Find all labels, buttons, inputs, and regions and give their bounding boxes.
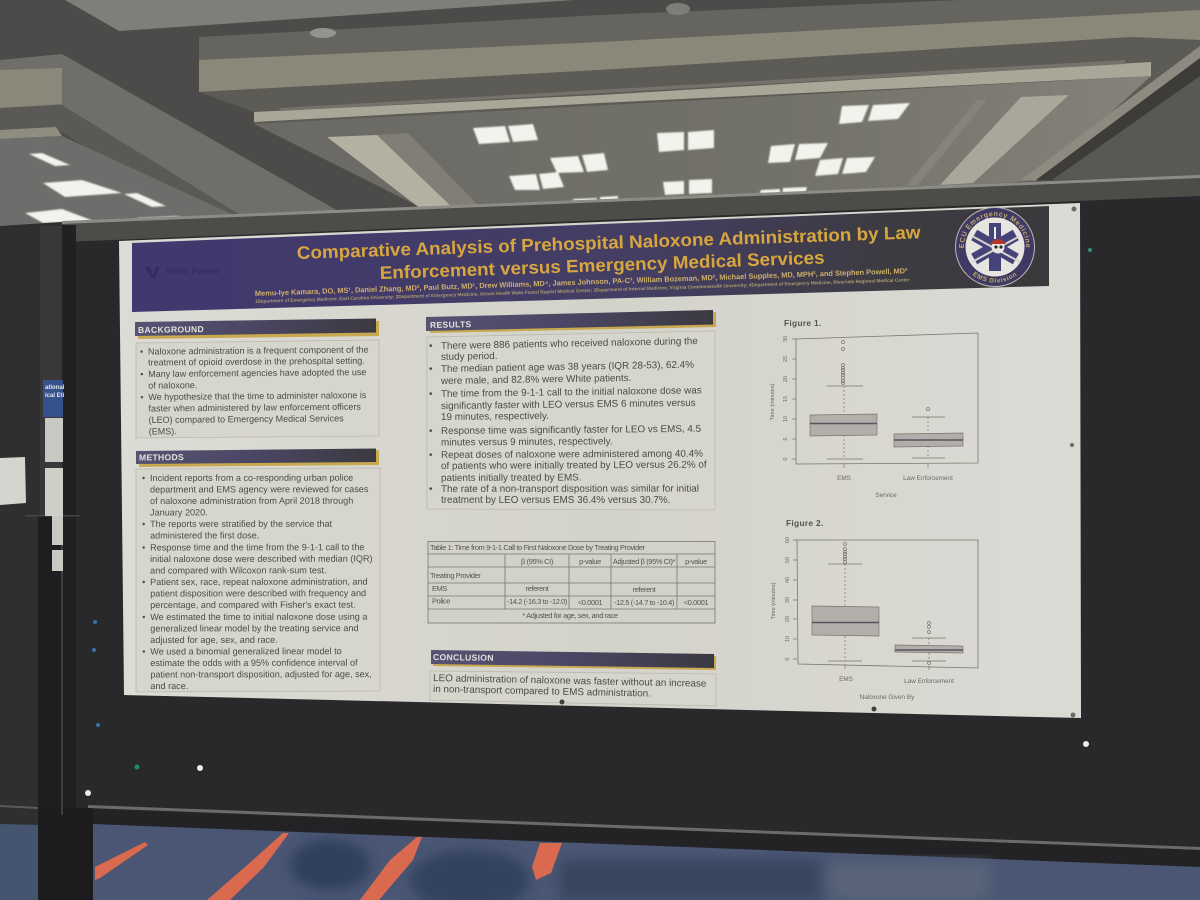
methods text: We used a binomial generalized linear model to <box>150 646 342 656</box>
methods text: • <box>142 519 145 529</box>
table 1: β (95% CI) <box>521 557 553 566</box>
methods text: administered the first dose. <box>150 530 259 540</box>
table 1: EMS <box>432 584 447 593</box>
results text: • <box>429 389 433 400</box>
results text: • <box>429 341 433 352</box>
results text: • <box>429 484 433 495</box>
methods text: The reports were stratified by the service that <box>150 519 333 529</box>
results text: The time from the 9-1-1 call to the initial naloxone dose was <box>441 385 702 400</box>
methods text: patient non-transport disposition, adjusted for age, sex, <box>150 669 372 679</box>
table 1: * Adjusted for age, sex, and race <box>522 611 618 620</box>
box plot: time by service: 30 <box>783 336 789 342</box>
methods text: and race. <box>150 681 188 691</box>
results text: Response time was significantly faster for LEO vs EMS, 4.5 <box>441 424 702 437</box>
box plot: time by naloxone provider: 30 <box>785 597 791 603</box>
background text: (LEO) compared to Emergency Medical Services <box>149 413 344 425</box>
box plot: time by service: 5 <box>783 437 789 441</box>
results text: • <box>429 450 433 461</box>
table 1: <0.0001 <box>684 598 708 607</box>
box plot: time by naloxone provider: 50 <box>785 557 791 563</box>
results text: of patients who were initially treated by LEO versus 26.2% of <box>441 460 707 472</box>
methods text: Response time and the time from the 9-1-1 call to the <box>150 542 364 552</box>
box plot: time by service: EMS <box>837 475 851 482</box>
ceiling lights <box>25 103 910 223</box>
figure 2 title: Figure 2. <box>786 518 824 528</box>
results text: 19 minutes, respectively. <box>441 411 549 423</box>
heading: background <box>135 318 379 339</box>
panel: results <box>426 310 716 510</box>
background text: • <box>140 392 144 402</box>
neighbouring poster at left <box>0 380 65 571</box>
box plot: time by service: Law Enforcement <box>903 475 953 482</box>
background text: treatment of opioid overdose in the prehospital setting. <box>148 356 365 367</box>
box plot: time by service <box>770 333 978 499</box>
heading: conclusion <box>431 650 716 670</box>
background text: • <box>140 347 143 357</box>
background text: We hypothesize that the time to administer naloxone is <box>148 390 367 402</box>
table 1: <0.0001 <box>578 598 602 607</box>
results text: treatment by LEO versus EMS 36.4% versus 30.7%. <box>441 495 670 506</box>
push pins <box>85 206 1092 796</box>
table 1: Treating Provider <box>430 571 481 580</box>
panel: conclusion <box>430 650 716 706</box>
background text <box>136 340 379 438</box>
box plot: time by naloxone provider: Naloxone Given By <box>860 694 915 701</box>
logo: ECU Emergency Medicine EMS Division: ECU Emergency Medicine <box>959 212 1030 248</box>
poster title: Enforcement versus Emergency Medical Services <box>379 247 825 283</box>
poster title <box>296 222 922 283</box>
table 1: -14.2 (-16.3 to -12.0) <box>507 597 567 606</box>
background text: (EMS). <box>149 426 177 436</box>
heading: methods <box>136 448 379 467</box>
room ceiling background <box>0 0 1200 240</box>
methods text: and compared with Wilcoxon rank-sum test. <box>150 565 327 575</box>
authors: Memu-Iye Kamara, DO, MS¹, Daniel Zhang, MD², Paul Butz, MD¹, Drew Williams, MD⁴, James Johnson, PA-C³, William Bozeman, MD², Michael Supples, MD, MPH², and Stephen Powell, MD² <box>255 266 908 298</box>
table 1: referent <box>526 584 549 593</box>
background text: Naloxone administration is a frequent component of the <box>148 345 369 356</box>
methods text: estimate the odds with a 95% confidence interval of <box>150 658 358 668</box>
heading: background: BACKGROUND <box>138 324 204 335</box>
table 1: -12.5 (-14.7 to -10.4) <box>614 598 674 607</box>
carpet <box>0 515 1200 900</box>
conclusion text: in non-transport compared to EMS administration. <box>433 684 651 700</box>
results text: study period. <box>441 351 498 363</box>
neighbouring poster at left: ical Eti <box>45 393 65 399</box>
figure 1 title: Figure 1. <box>784 318 822 328</box>
results text: were male, and 82.8% were White patients. <box>440 373 631 387</box>
results text: significantly faster with LEO versus EMS 6 minutes versus <box>441 398 696 412</box>
box plot: time by naloxone provider: Law Enforcement <box>904 678 954 685</box>
box plot: time by service: Time (minutes) <box>770 383 776 421</box>
table 1: referent <box>633 585 656 594</box>
methods text: • <box>142 473 145 483</box>
methods text: percentage, and compared with Fisher's exact test. <box>150 600 356 610</box>
box plot: time by service: 15 <box>783 396 789 402</box>
methods text: • <box>142 612 145 622</box>
logo: ECU Emergency Medicine EMS Division <box>955 207 1035 287</box>
affiliations: 1Department of Emergency Medicine, East Carolina University; 2Department of Emergency Medicine, Atrium Health Wake Forest Baptist Medical Center; 3Department of Internal Medicine, Virginia Commonwealth University; 4Department of Emergency Medicine, Riverside Regional Medical Center <box>255 277 910 305</box>
methods text: • <box>142 543 145 553</box>
methods text: • <box>142 647 145 657</box>
background text: • <box>140 369 143 379</box>
methods text <box>136 468 380 692</box>
heading: methods: METHODS <box>139 452 184 462</box>
panel: background <box>135 318 379 438</box>
methods text: adjusted for age, sex, and race. <box>150 635 278 645</box>
background text: Many law enforcement agencies have adopted the use <box>148 367 366 379</box>
box plot: time by service: 10 <box>783 416 789 422</box>
results text <box>427 331 715 510</box>
background text: faster when administered by law enforcement officers <box>148 402 361 413</box>
box plot: time by naloxone provider: 10 <box>785 636 791 642</box>
table 1 <box>428 542 715 623</box>
box plot: time by naloxone provider: 40 <box>785 577 791 583</box>
box plot: time by service: Service <box>875 492 897 499</box>
methods text: Incident reports from a co-responding urban police <box>150 473 353 483</box>
methods text: department and EMS agency were reviewed for cases <box>150 484 369 494</box>
box plot: time by naloxone provider: 0 <box>785 657 791 661</box>
methods text: of naloxone administration from April 2018 through <box>150 496 353 506</box>
box plot: time by naloxone provider: Time (minutes) <box>771 582 777 620</box>
wake forest logo <box>145 266 219 278</box>
methods text: January 2020. <box>150 507 208 517</box>
methods text: Patient sex, race, repeat naloxone administration, and <box>150 577 368 587</box>
results text: Repeat doses of naloxone were administered among 40.4% <box>441 449 703 461</box>
header banner <box>132 206 1049 312</box>
ceiling sprinkler <box>310 28 336 38</box>
methods text: generalized linear model by the treating service and <box>150 623 359 633</box>
results text: patients initially treated by EMS. <box>441 473 582 484</box>
results text: minutes versus 9 minutes, respectively. <box>441 436 613 448</box>
figure 2 <box>771 518 978 701</box>
box plot: time by service: 0 <box>783 457 789 461</box>
box plot: time by service: 20 <box>783 376 789 382</box>
results text: The median patient age was 38 years (IQR 28-53), 62.4% <box>441 360 694 375</box>
table 1: Table 1: Time from 9-1-1 Call to First Naloxone Dose by Treating Provider <box>430 543 646 552</box>
methods text: We estimated the time to initial naloxone dose using a <box>150 612 368 622</box>
logo: ECU Emergency Medicine EMS Division: EMS Division <box>972 272 1017 283</box>
carpet red stripes <box>95 833 562 900</box>
heading: conclusion: CONCLUSION <box>433 652 494 663</box>
poster sheet <box>119 203 1081 718</box>
results text: • <box>429 426 433 437</box>
panel: methods <box>136 448 380 692</box>
conclusion text <box>430 671 716 706</box>
methods text: initial naloxone dose were described with median (IQR) <box>150 554 373 564</box>
table 1: p-value <box>579 557 601 566</box>
results text: The rate of a non-transport disposition was similar for initial <box>441 484 699 495</box>
box plot: time by naloxone provider: 20 <box>785 616 791 622</box>
box plot: time by naloxone provider: 60 <box>785 537 791 543</box>
heading: results: RESULTS <box>430 319 472 330</box>
methods text: patient disposition were described with frequency and <box>150 588 366 598</box>
table 1: Police <box>432 596 450 606</box>
figure 1 <box>770 318 978 499</box>
wake forest logo: Wake Forest <box>166 266 219 276</box>
results text: • <box>429 364 433 375</box>
box plot: time by naloxone provider <box>771 537 978 701</box>
background text: of naloxone. <box>148 380 197 390</box>
conclusion text: LEO administration of naloxone was faster without an increase <box>433 673 707 690</box>
box plot: time by service: 25 <box>783 356 789 362</box>
table 1: Adjusted β (95% CI)* <box>613 557 676 566</box>
heading: results <box>426 310 716 333</box>
box plot: time by naloxone provider: EMS <box>839 676 853 683</box>
results text: There were 886 patients who received naloxone during the <box>441 336 698 352</box>
table 1: p-value <box>685 557 707 566</box>
methods text: • <box>142 577 145 587</box>
poster title: Comparative Analysis of Prehospital Naloxone Administration by Law <box>296 222 922 263</box>
neighbouring poster at left: ational <box>45 385 65 391</box>
